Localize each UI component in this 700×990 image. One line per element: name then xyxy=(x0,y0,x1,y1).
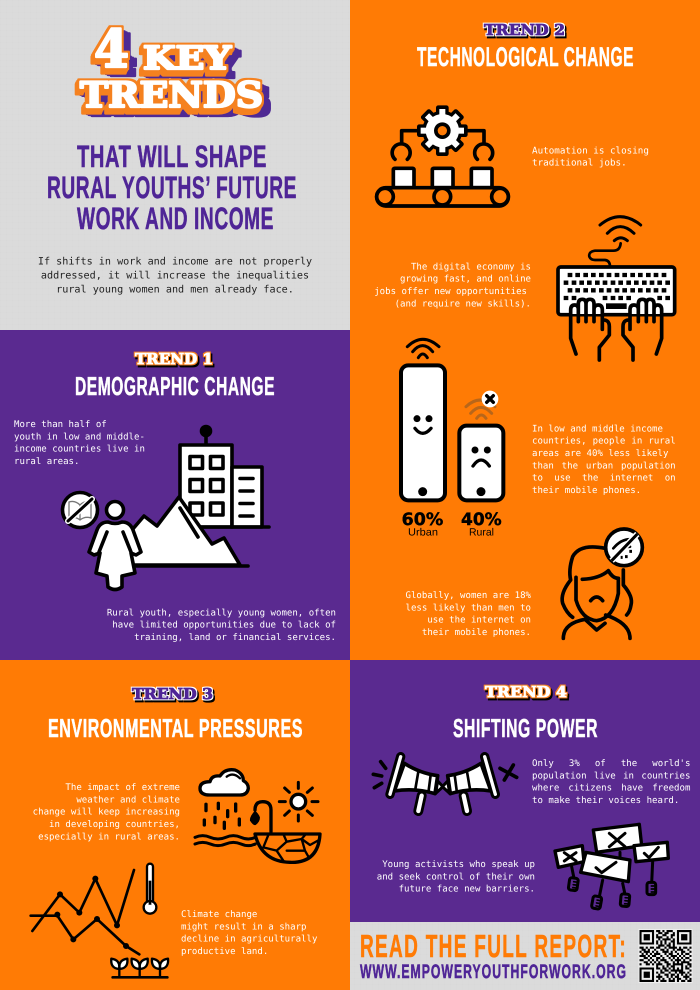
text: low and middle income: In low and middle income xyxy=(532,424,663,434)
text: low and middle income: their mobile phones. xyxy=(532,486,641,496)
icon: city buildings xyxy=(180,426,269,527)
icon: no books badge xyxy=(62,492,98,528)
heading: ENVIRONMENTAL PRESSURES xyxy=(48,713,303,743)
text: extreme weather: change will keep increasing xyxy=(33,808,180,818)
text: digital economy: jobs offer new opportunities xyxy=(374,287,527,297)
icon: protest signs xyxy=(555,824,668,909)
text: climate change: decline in agriculturally xyxy=(181,935,318,945)
text: more than half: More than half of xyxy=(14,420,107,430)
stat: urban 60%: 60% xyxy=(402,510,443,530)
text: young activists: Young activists who speak up xyxy=(382,860,535,870)
text: extreme weather: weather and climate xyxy=(76,795,180,805)
text: climate change: productive land. xyxy=(181,947,268,957)
text: extreme weather: The impact of extreme xyxy=(65,783,180,793)
subtitle: THAT WILL SHAPE xyxy=(77,139,267,174)
icon: mountains xyxy=(128,497,248,566)
text: extreme weather: in developing countries, xyxy=(49,820,180,830)
stat: urban 60% xyxy=(402,510,443,539)
qr code xyxy=(638,929,693,983)
text: digital economy: (and require new skills). xyxy=(395,299,531,309)
panel: trend 4 shifting power xyxy=(350,660,700,922)
title: 4 key trends: 4 xyxy=(94,19,129,80)
text: more than half: rural areas. xyxy=(14,457,79,467)
intro paragraph: addressed, it will increase the inequalities xyxy=(41,270,309,282)
text: young activists: and seek control of their own xyxy=(377,872,535,882)
trend 3 label: TREND 3 xyxy=(132,685,213,703)
title: 4 key trends xyxy=(80,19,263,116)
text: rural youth: training, land or financial services. xyxy=(134,633,336,643)
panel: trend 2 technological change xyxy=(350,0,700,660)
text: globally women: less likely than men to xyxy=(406,603,531,613)
text: young activists: future face new barriers. xyxy=(399,885,535,895)
icon: woman with no internet badge xyxy=(562,529,642,638)
stat: rural 40%: Rural xyxy=(469,527,494,539)
icon: keyboard with hands and wifi xyxy=(558,217,675,360)
text: low and middle income: to use the internet on xyxy=(532,474,676,484)
stat: urban 60%: Urban xyxy=(408,527,438,539)
text: more than half: income countries live in xyxy=(14,445,145,455)
panel: intro xyxy=(0,0,350,330)
panel: trend 1 demographic change xyxy=(0,330,350,660)
text: automation: traditional jobs. xyxy=(532,158,627,169)
trend 4 label: TREND 4 xyxy=(485,683,567,701)
text: only 3%: to make their voices heard. xyxy=(532,796,679,806)
icon: thermometer xyxy=(144,864,156,914)
text: extreme weather: especially in rural areas. xyxy=(38,832,180,842)
icon: urban phone xyxy=(401,339,445,500)
icon: young woman xyxy=(89,502,141,590)
text: climate change: might result in a sharp xyxy=(181,922,306,932)
intro paragraph: If shifts in work and income are not properly xyxy=(38,256,312,268)
heading: SHIFTING POWER xyxy=(453,713,598,743)
title: 4 key trends: TRENDS xyxy=(80,75,263,116)
trend 1 label: TREND 1 xyxy=(135,350,213,368)
text: globally women: Globally, women are 18% xyxy=(406,591,532,601)
icon: gear and conveyor belt xyxy=(377,105,508,206)
text: only 3%: where citizens have freedom xyxy=(532,784,691,794)
text: globally women: their mobile phones. xyxy=(422,628,531,638)
text: low and middle income: countries, people in rural xyxy=(532,437,676,447)
text: digital economy: growing fast, and online xyxy=(400,275,531,285)
trend 2 label: TREND 2 xyxy=(484,21,565,39)
text: low and middle income: than the urban population xyxy=(532,461,676,471)
text: automation: Automation is closing xyxy=(532,145,649,156)
text: low and middle income: areas are 40% less likely xyxy=(532,449,669,459)
text: only 3%: Only 3% of the world's xyxy=(532,759,690,769)
intro paragraph: rural young women and men already face. xyxy=(56,284,294,296)
subtitle: RURAL YOUTHS’ FUTURE xyxy=(47,170,297,205)
text: only 3%: population live in countries xyxy=(532,771,690,781)
icon: opposing megaphones xyxy=(373,757,517,811)
stat: rural 40%: 40% xyxy=(461,510,502,530)
panel: read the full report footer xyxy=(350,922,700,990)
text: climate change: Climate change xyxy=(181,910,257,920)
text: more than half: youth in low and middle- xyxy=(14,432,145,442)
icon: weather, sun and cracked land xyxy=(195,770,320,862)
text: globally women: use the internet on xyxy=(427,616,531,626)
panel: trend 3 environmental pressures xyxy=(0,660,350,990)
stat: rural 40% xyxy=(461,510,502,539)
text: rural youth: Rural youth, especially young women, often xyxy=(107,608,336,618)
icon: rural phone xyxy=(459,391,503,500)
text: digital economy: The digital economy is xyxy=(411,262,531,272)
heading: DEMOGRAPHIC CHANGE xyxy=(75,371,275,401)
icon: crop seedlings xyxy=(111,959,168,977)
subtitle: WORK AND INCOME xyxy=(77,201,274,236)
title: 4 key trends: KEY xyxy=(143,39,232,77)
chart: falling climate lines xyxy=(31,870,139,954)
text: rural youth: have limited opportunities due to lack of xyxy=(112,621,336,631)
